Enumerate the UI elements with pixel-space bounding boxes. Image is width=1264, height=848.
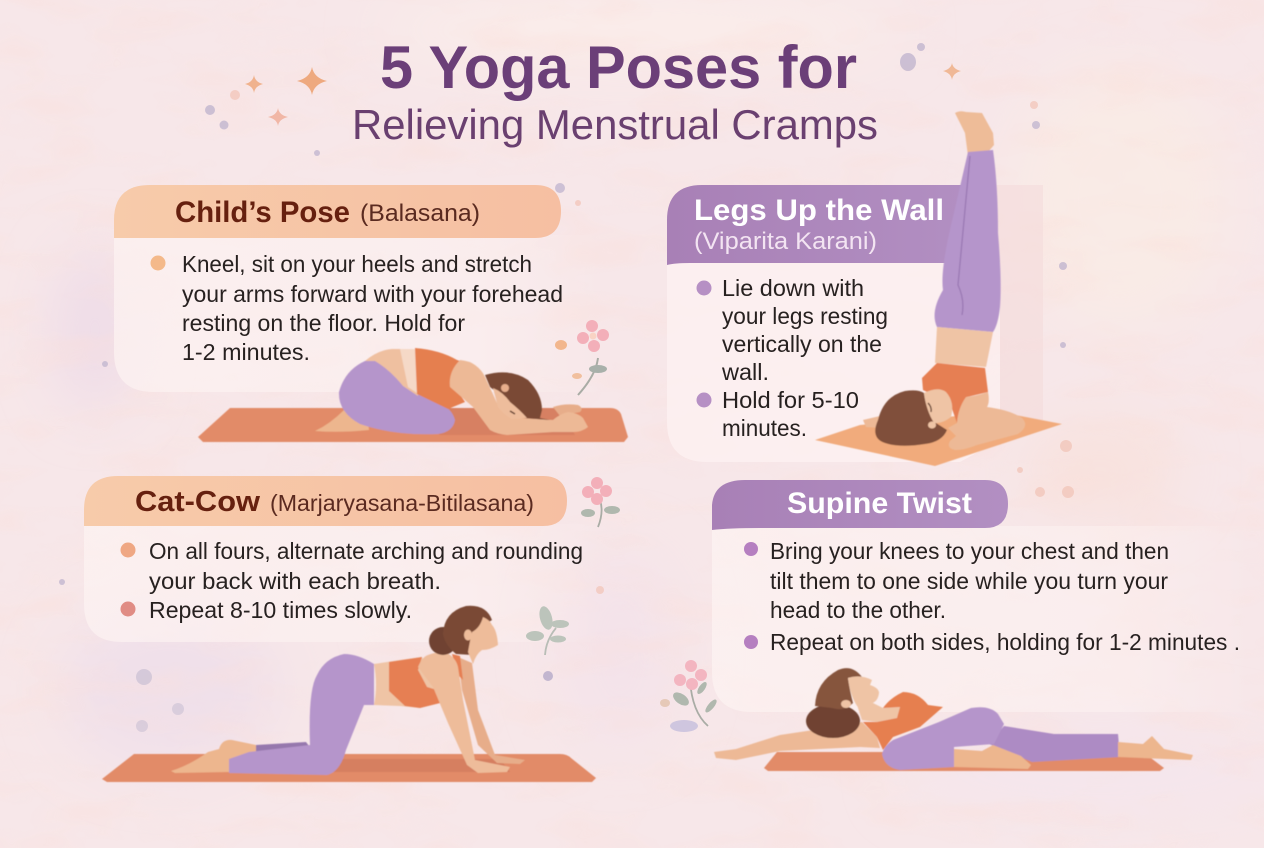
bullet [150, 256, 166, 270]
bullet [744, 542, 758, 556]
panel body [114, 235, 600, 392]
panel: supine twist [712, 480, 1250, 712]
bullet [696, 392, 712, 408]
instructions: Lie down with [722, 275, 864, 301]
panel body [667, 262, 1000, 462]
instructions: Repeat 8-10 times slowly. [149, 597, 412, 623]
panel header [84, 476, 567, 527]
panel: legs up the wall [667, 185, 1043, 462]
instructions: your arms forward with your forehead [182, 281, 563, 307]
panel: cat-cow [84, 476, 600, 642]
illustration: cat-cow figure on mat [102, 606, 596, 782]
panel body [84, 524, 600, 642]
illustration: child's pose figure on mat [198, 348, 628, 442]
instructions: Kneel, sit on your heels and stretch [182, 251, 532, 277]
instructions: vertically on the [722, 331, 882, 357]
title: 5 Yoga Poses for [380, 34, 857, 101]
decoration: flower at supine twist [660, 660, 718, 732]
wall [960, 185, 1043, 420]
heading: Legs Up the Wall [694, 194, 944, 227]
instructions: your legs resting [722, 303, 888, 329]
instructions: Hold for 5-10 [722, 387, 859, 413]
heading: Supine Twist [787, 487, 972, 520]
panel: child's pose [114, 185, 600, 392]
bullet [696, 280, 712, 296]
illustration: legs up the wall figure on mat [815, 111, 1062, 466]
instructions [182, 251, 563, 365]
instructions: Bring your knees to your chest and then [770, 538, 1169, 564]
instructions: minutes. [722, 415, 807, 441]
heading: Cat-Cow [135, 486, 260, 518]
instructions [770, 538, 1240, 655]
panel header [114, 185, 561, 238]
instructions: wall. [721, 359, 769, 385]
subtitle: Relieving Menstrual Cramps [352, 101, 878, 148]
instructions: Repeat on both sides, holding for 1-2 minutes . [770, 629, 1240, 655]
instructions: head to the other. [770, 597, 946, 623]
panel header [712, 480, 1008, 530]
bullet [120, 602, 136, 616]
bullet [744, 635, 758, 649]
instructions: tilt them to one side while you turn your [770, 568, 1168, 594]
decoration: flower and sprig [136, 477, 620, 732]
sanskrit name: (Balasana) [360, 200, 480, 227]
sanskrit name: (Marjaryasana-Bitilasana) [270, 490, 534, 516]
instructions [721, 275, 888, 441]
instructions: On all fours, alternate arching and rounding [149, 538, 583, 564]
sanskrit name: (Viparita Karani) [694, 228, 877, 255]
instructions: your back with each breath. [149, 568, 441, 594]
decoration: pink flower [555, 320, 609, 395]
sparkles and dots near title [59, 43, 1074, 594]
instructions: resting on the floor. Hold for [182, 310, 465, 336]
panel header [667, 185, 970, 265]
instructions [149, 538, 583, 623]
illustration: supine twist figure on mat [714, 668, 1193, 771]
panel body [712, 526, 1250, 712]
bullet [120, 542, 136, 558]
heading: Child’s Pose [175, 196, 350, 229]
instructions: 1-2 minutes. [182, 339, 310, 365]
